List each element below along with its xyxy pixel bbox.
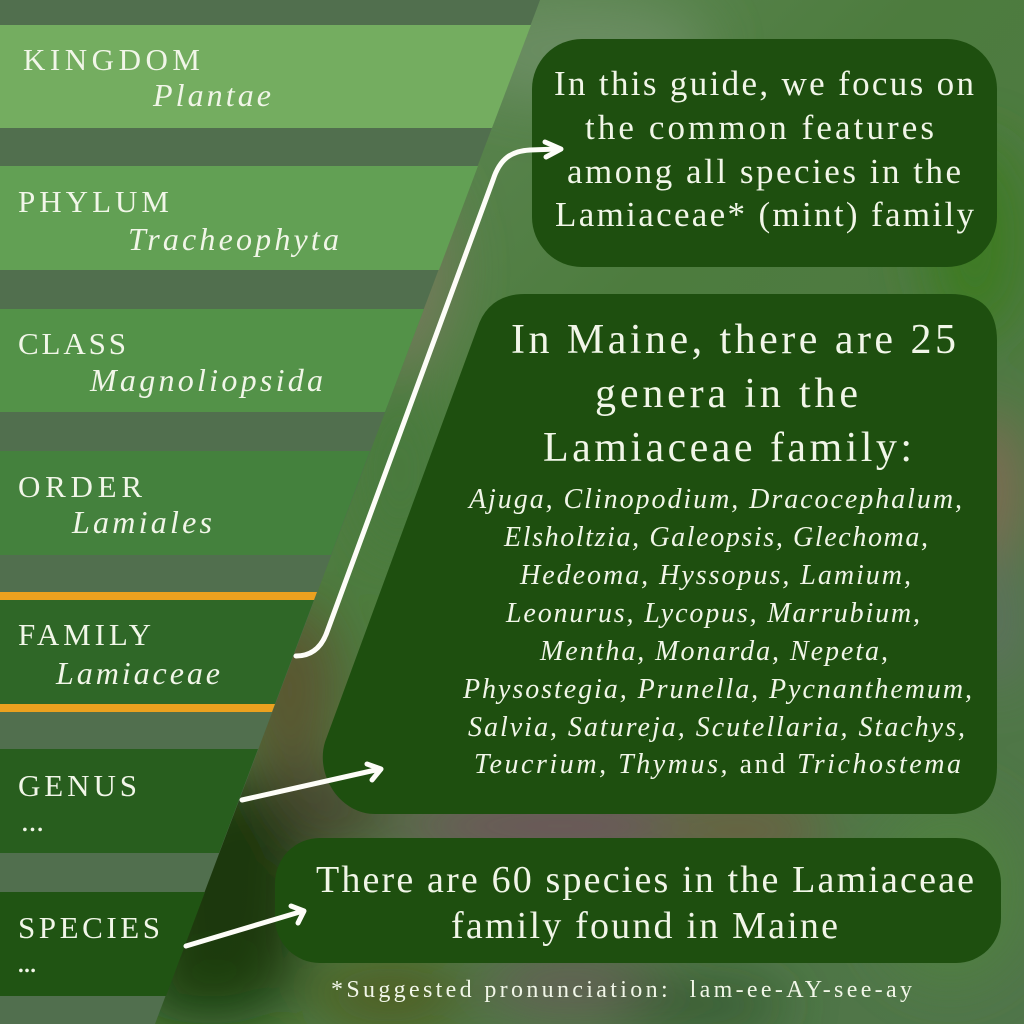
list: genera names: Leonurus, Lycopus, Marrubium, bbox=[505, 598, 920, 629]
label: family: FAMILY bbox=[18, 617, 151, 652]
panel: guide focus bbox=[532, 39, 997, 267]
highlight line: family top bbox=[0, 592, 317, 600]
panel: guide focus: Lamiaceae* (mint) family bbox=[555, 195, 974, 234]
label: family bbox=[18, 617, 220, 691]
list: genera names: Physostegia, Prunella, Pycnanthemum, bbox=[462, 674, 972, 705]
list: genera names: Hedeoma, Hyssopus, Lamium, bbox=[519, 560, 911, 591]
label: phylum: Tracheophyta bbox=[128, 221, 339, 257]
label: species: ... bbox=[17, 944, 37, 979]
label: family: Lamiaceae bbox=[55, 655, 220, 691]
band: phylum bbox=[0, 166, 478, 270]
label: order: ORDER bbox=[18, 469, 142, 504]
label: phylum bbox=[18, 184, 339, 257]
band: class bbox=[0, 309, 424, 412]
arrow: genus to genera panel bbox=[242, 764, 381, 800]
band: species bbox=[0, 892, 205, 996]
panel: species count: family found in Maine bbox=[451, 905, 838, 947]
heading: genera count bbox=[511, 317, 956, 471]
label: order: Lamiales bbox=[71, 504, 212, 540]
heading: genera count: genera in the bbox=[595, 371, 858, 417]
panel: guide focus: the common features bbox=[585, 108, 934, 147]
panel: species count bbox=[275, 838, 1001, 963]
list: genera names: Salvia, Satureja, Scutellaria, Stachys, bbox=[468, 712, 965, 743]
panel: guide focus: In this guide, we focus on bbox=[554, 64, 974, 103]
band: family bbox=[0, 600, 314, 704]
label: species: SPECIES bbox=[18, 910, 160, 945]
label: genus: GENUS bbox=[18, 768, 137, 803]
band: order bbox=[0, 451, 370, 555]
label: genus bbox=[18, 768, 137, 838]
panel: genera in Maine bbox=[323, 294, 997, 814]
label: class: CLASS bbox=[18, 326, 126, 361]
label: genus: ... bbox=[21, 803, 44, 838]
label: class: Magnoliopsida bbox=[89, 362, 323, 398]
footnote: pronunciation: *Suggested pronunciation: lam-ee-AY-see-ay bbox=[331, 977, 912, 1003]
label: kingdom: KINGDOM bbox=[23, 42, 200, 77]
panel: species count: There are 60 species in the Lamiaceae bbox=[316, 859, 974, 901]
band: kingdom bbox=[0, 25, 531, 128]
label: species bbox=[17, 910, 160, 979]
heading: genera count: In Maine, there are 25 bbox=[511, 317, 956, 363]
highlight line: family bottom bbox=[0, 704, 275, 712]
label: class bbox=[18, 326, 323, 398]
list: genera names: Teucrium, Thymus, and Trichostema bbox=[474, 749, 961, 780]
list: genera names bbox=[462, 484, 972, 780]
list: genera names: Mentha, Monarda, Nepeta, bbox=[539, 636, 888, 667]
label: phylum: PHYLUM bbox=[18, 184, 169, 219]
list: genera names: Ajuga, Clinopodium, Dracocephalum, bbox=[467, 484, 962, 515]
list: genera names: Elsholtzia, Galeopsis, Glechoma, bbox=[503, 522, 928, 553]
panel: guide focus: among all species in the bbox=[567, 152, 961, 191]
label: order bbox=[18, 469, 212, 540]
label: kingdom: Plantae bbox=[152, 77, 271, 113]
taxonomy funnel backing bbox=[0, 0, 540, 1024]
band: genus bbox=[0, 749, 258, 853]
arrow: species to species panel bbox=[186, 906, 304, 946]
arrow: family to guide focus bbox=[296, 142, 561, 656]
heading: genera count: Lamiaceae family: bbox=[543, 425, 912, 471]
label: kingdom bbox=[23, 42, 271, 113]
